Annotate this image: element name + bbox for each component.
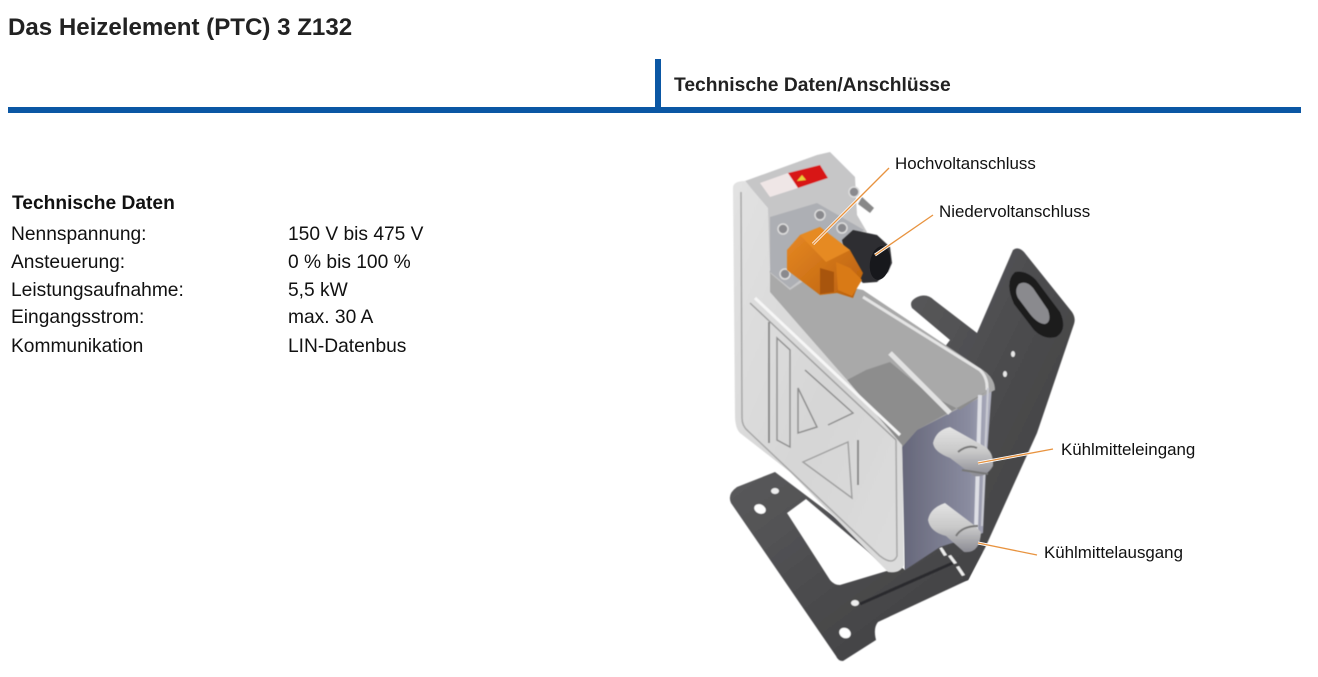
warning triangle — [797, 175, 806, 181]
header rule — [8, 107, 1301, 113]
low voltage connector — [842, 230, 892, 283]
base plate holes — [753, 502, 853, 640]
row: Eingangsstrom — [11, 307, 374, 328]
coolant outlet pipe — [928, 503, 981, 552]
terminal pin — [858, 197, 874, 213]
row: Ansteuerung — [11, 252, 411, 273]
row: Nennspannung — [11, 224, 424, 245]
row: Leistungsaufnahme: Leistungsaufnahme: — [11, 280, 184, 301]
leader: Kühlmittelausgang — [978, 543, 1037, 555]
high voltage connector — [787, 227, 863, 298]
label: Kühlmittelausgang: Kühlmittelausgang — [1044, 543, 1183, 562]
mounting bolts — [778, 187, 859, 279]
row: Kommunikation: LIN-Datenbus — [288, 336, 406, 357]
front face relief lines — [741, 192, 900, 561]
base plate highlights — [771, 488, 965, 606]
bracket oval opening — [1009, 272, 1063, 338]
top ridge highlight — [890, 353, 950, 413]
row: Nennspannung: Nennspannung: — [11, 224, 146, 245]
heater side face — [902, 386, 992, 570]
bracket small holes — [1003, 351, 1015, 377]
section heading: Technische Daten/Anschlüsse — [674, 75, 951, 96]
data heading: Technische Daten — [12, 193, 175, 214]
panel: technical data — [11, 193, 424, 357]
back bracket — [905, 248, 1075, 590]
base plate crease — [860, 562, 955, 604]
row: Eingangsstrom: Eingangsstrom: — [11, 307, 144, 328]
leader: Hochvoltanschluss — [813, 168, 889, 244]
top rim highlight — [863, 297, 987, 390]
lower block on top face — [847, 362, 986, 447]
base plate — [730, 472, 982, 661]
row: Leistungsaufnahme: 5,5 kW — [288, 280, 348, 301]
row: Kommunikation: Kommunikation — [11, 336, 143, 357]
warning label — [760, 173, 798, 197]
label: Hochvoltanschluss: Hochvoltanschluss — [895, 154, 1036, 173]
label: Kühlmitteleingang: Kühlmitteleingang — [1061, 440, 1195, 459]
connector opening — [867, 245, 893, 281]
coolant inlet pipe — [933, 427, 993, 476]
side rim highlight — [976, 395, 980, 530]
row: Ansteuerung: 0 % bis 100 % — [288, 252, 411, 273]
row: Eingangsstrom: max. 30 A — [288, 307, 373, 328]
section divider bar — [655, 59, 661, 107]
row: Kommunikation — [11, 336, 406, 357]
row: Nennspannung: 150 V bis 475 V — [288, 224, 423, 245]
connector housing — [745, 152, 874, 290]
heater front face — [733, 181, 904, 572]
title: Das Heizelement (PTC) 3 Z132 — [8, 14, 352, 41]
heater top face — [767, 270, 995, 447]
leader: Niedervoltanschluss — [875, 215, 933, 255]
red warning label — [788, 165, 828, 188]
heater body — [733, 181, 995, 572]
row: Ansteuerung: Ansteuerung: — [11, 252, 125, 273]
leader: Kühlmitteleingang — [978, 449, 1053, 463]
row: Leistungsaufnahme — [11, 280, 348, 301]
label: Niedervoltanschluss: Niedervoltanschluss — [939, 202, 1090, 221]
